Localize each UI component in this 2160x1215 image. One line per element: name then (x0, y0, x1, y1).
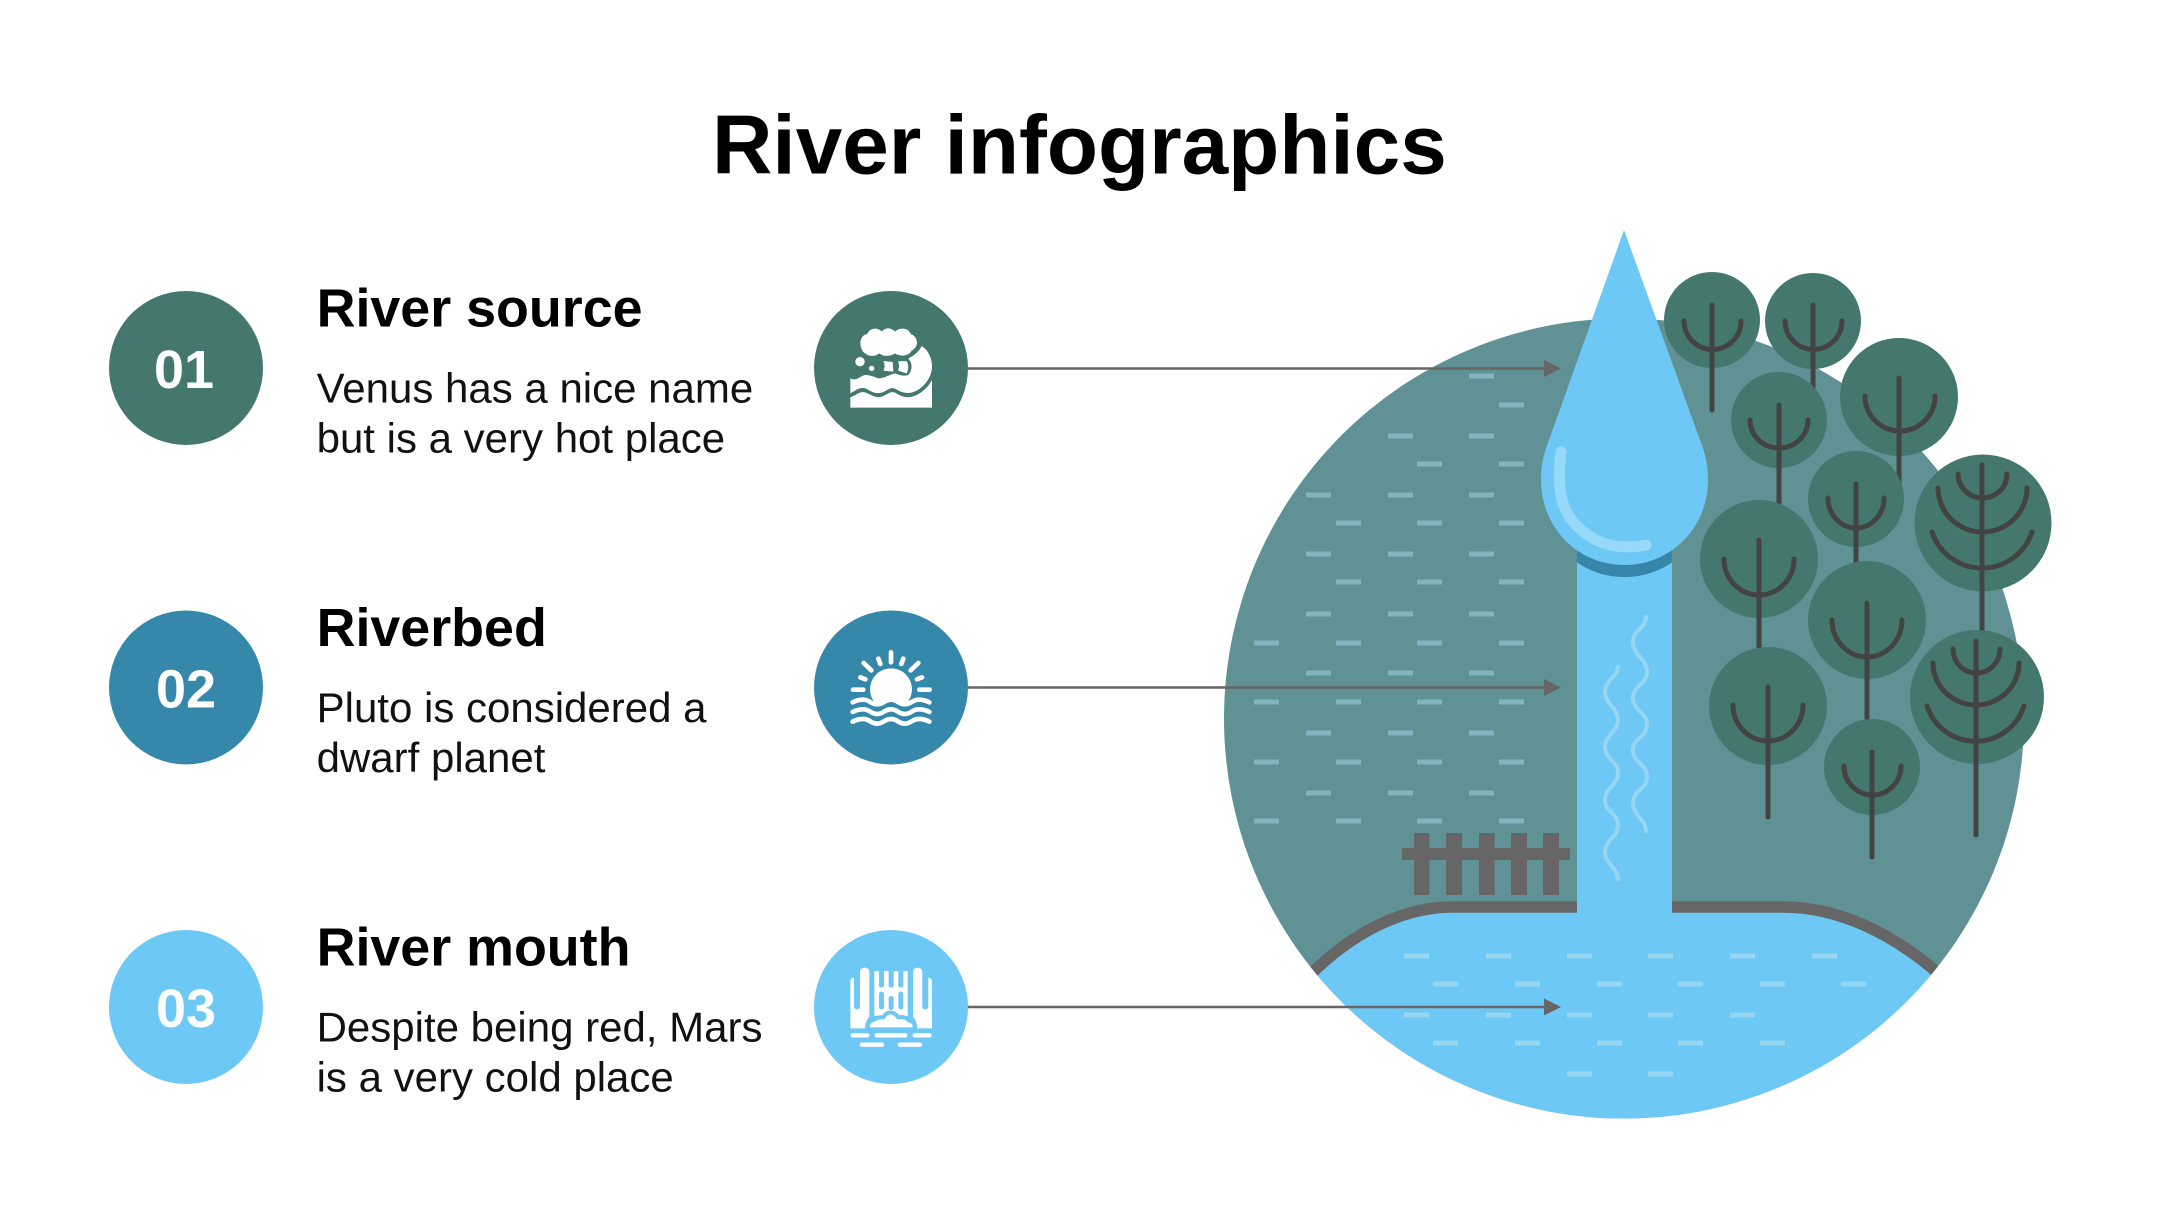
tree 7 (1808, 561, 1926, 725)
tree 1 (1664, 272, 1760, 410)
description: riverbed: dwarf planet (317, 734, 546, 781)
tree 4 (1731, 372, 1827, 510)
row 2: riverbed (109, 598, 707, 781)
row 1: river source (109, 278, 753, 462)
description: river mouth: Despite being red, Mars (317, 1004, 762, 1050)
description: river source: but is a very hot place (317, 414, 725, 462)
river illustration (1224, 230, 2052, 1130)
ground water dashes (1254, 376, 1524, 821)
icon: sunset over water (814, 610, 968, 764)
tree 5 (1808, 451, 1904, 570)
number badge 01 (109, 291, 263, 445)
icon: wave (814, 291, 968, 445)
icon: waterfall (814, 930, 968, 1084)
tree 11 (1824, 719, 1920, 857)
arrow 1 (968, 360, 1561, 377)
title: River infographics (712, 98, 1447, 192)
description: river mouth: is a very cold place (317, 1054, 674, 1100)
number badge 02: 02 (156, 660, 216, 720)
lake water dashes (1404, 956, 1866, 1074)
tree 8 (1914, 454, 2052, 640)
tree 3 (1840, 338, 1958, 490)
row 3: river mouth (109, 918, 762, 1100)
heading: river source: River source (317, 278, 643, 338)
ground circle (1224, 318, 2024, 1118)
number badge 02 (109, 610, 263, 764)
heading: riverbed: Riverbed (317, 598, 547, 658)
tree 10 (1709, 647, 1827, 817)
number badge 03 (109, 930, 263, 1084)
description: riverbed: Pluto is considered a (317, 684, 707, 731)
drop shadow (1577, 550, 1672, 577)
arrow 2 (968, 679, 1561, 696)
heading: river mouth: River mouth (317, 918, 630, 978)
tree 6 (1700, 500, 1818, 655)
drop highlight (1559, 452, 1646, 547)
fence (1402, 833, 1570, 895)
number badge 03: 03 (156, 979, 216, 1039)
water drop (1541, 230, 1708, 565)
tree 2 (1765, 273, 1861, 395)
tree 9 (1910, 630, 2044, 835)
number badge 01: 01 (154, 340, 214, 400)
lake with banks (1310, 562, 1938, 1118)
description: river source: Venus has a nice name (317, 364, 753, 412)
river waves (1605, 617, 1647, 879)
arrow 3 (968, 998, 1561, 1016)
